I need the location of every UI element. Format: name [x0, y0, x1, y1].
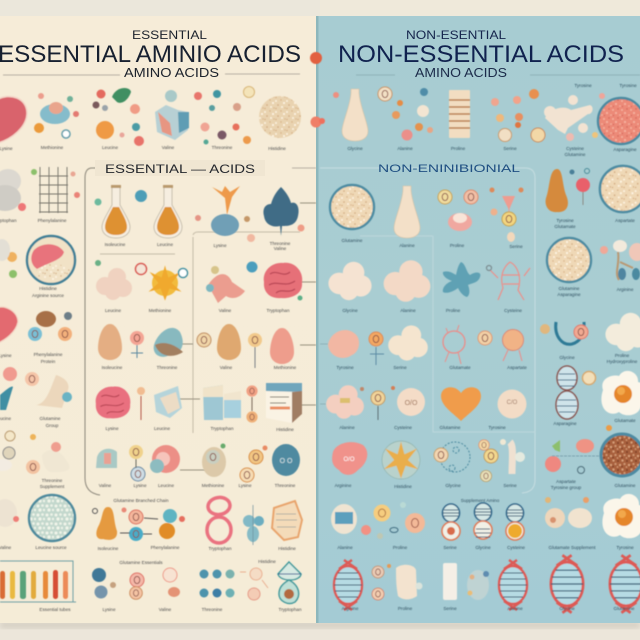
icon: pale blue cloth — [137, 386, 182, 431]
essential side illustrations — [0, 52, 322, 612]
icon: pink tree with medallions: Glutamate — [449, 365, 471, 370]
icon: orange flower and blue blob — [195, 186, 255, 248]
non-essential side illustrations — [319, 83, 640, 613]
icon: pastel organ — [34, 93, 79, 150]
connector rules and container outlines — [3, 74, 640, 495]
icon: pink pin and yellow medallions: Serine — [509, 244, 523, 249]
icon: red dna three: Glycine — [559, 606, 575, 611]
icon: blue leaf — [263, 187, 304, 251]
icon: white puff two — [384, 260, 430, 313]
icon: cream smile lump: Cysteine — [394, 425, 412, 430]
icon: pink lump: Tyrosine — [336, 365, 354, 370]
icon: left figure row five — [0, 367, 72, 428]
icon: scattered salmon molecules — [491, 89, 545, 151]
icon: left bowl with pink: Arginine source — [32, 293, 64, 298]
icon: pink figure eight: Tryptophan — [208, 546, 232, 551]
icon: right cream blob: Hydroxyproline — [607, 359, 638, 364]
icon: left pair row six — [0, 431, 69, 489]
panel: essential amino acids background — [0, 16, 317, 623]
icon: orange heart — [440, 387, 481, 430]
subtitle: amino acids left: AMINO ACIDS — [124, 66, 219, 80]
icon: fried egg one — [601, 371, 640, 423]
icon: blue ball: Threonine — [275, 483, 296, 488]
icon: red meat — [0, 96, 27, 151]
icon: cream round: C/O — [507, 400, 518, 406]
icon: pale blue cloth: Leucine — [154, 426, 170, 431]
icon: orange flask two: Leucine — [157, 242, 173, 247]
icon: left bowl with pink: Histidine — [39, 286, 57, 291]
icon: white puff one: Glycine — [342, 308, 358, 313]
icon: red dna one — [334, 560, 362, 611]
icon: blue leaf: Threonine — [270, 241, 291, 246]
icon: pale peach figure — [240, 559, 276, 600]
icon: left mint bowl: Leucine source — [35, 545, 67, 550]
icon: grey figure and circles — [96, 445, 147, 488]
icon: left mint bowl — [0, 495, 75, 550]
icon: scattered molecules: Threonine — [212, 145, 233, 150]
icon: cream capsule: Proline — [398, 606, 413, 611]
chart: test tubes: Essential tubes — [39, 607, 71, 612]
icon: fried egg two: Tyrosine — [616, 545, 634, 550]
icon: cream lump: Serine — [393, 365, 407, 370]
icon: leaf and small molecules: Leucine — [102, 145, 118, 150]
chart: test tubes — [0, 561, 76, 612]
icon: peach medallion — [393, 513, 425, 550]
icon: left figure row five: Group — [46, 423, 59, 428]
icon: scattered salmon molecules: Serine — [503, 146, 517, 151]
icon: brown ellipse and circles: Phenylalanine — [34, 352, 63, 357]
icon: blue dot grid — [200, 570, 234, 612]
icon: right figure row three: Arginine — [617, 287, 634, 292]
icon: pink egg: Methionine — [274, 365, 297, 370]
icon: left bowl with pink — [0, 236, 75, 298]
icon: blue star — [443, 262, 480, 313]
icon: pink tree: Cysteine — [504, 308, 522, 313]
icon: pink linked circles: Valine — [159, 607, 172, 612]
icon: cream flask — [319, 89, 368, 151]
icon: pale capsule — [331, 504, 371, 550]
icon: pink egg — [270, 328, 297, 370]
icon: brown ellipse and circles: Protein — [41, 359, 56, 364]
icon: pale lump row five: Alanine — [339, 425, 355, 430]
icon: pink lump row six: O/O — [343, 457, 355, 463]
icon: blue molecules — [92, 568, 116, 612]
icon: red dna three — [551, 555, 583, 613]
icon: red dna four — [610, 555, 640, 613]
icon: egg with circles: Valine — [220, 365, 233, 370]
icon: cream smile lump — [394, 388, 425, 430]
icon: small dna three: Cysteine — [507, 545, 525, 550]
icon: dna helix right: Asparagine — [553, 421, 577, 426]
icon: left figure row five: Glutamine — [40, 416, 61, 421]
icon: egg brown: Isoleucine — [102, 365, 123, 370]
icon: egg with circles — [197, 324, 262, 370]
icon: orange pear right — [546, 169, 576, 229]
icon: teal and orange cluster — [151, 509, 185, 550]
icon: blue molecules: Lysine — [102, 607, 116, 612]
icon: white tube: Serine — [443, 606, 457, 611]
icon: orange heart: Glutamine — [440, 425, 461, 430]
icon: blue swirl network: Glycine — [445, 483, 461, 488]
icon: orange flask two — [94, 185, 182, 247]
icon: beige bowl middle: Asparagine — [557, 292, 581, 297]
icon: supplement boxes — [203, 385, 258, 431]
icon: teal dna bulb: Tryptophan — [278, 607, 302, 612]
icon: grey cloud — [0, 169, 26, 223]
icon: blue ball — [272, 444, 300, 488]
icon: large box — [266, 383, 302, 432]
icon: cream lump — [388, 325, 428, 370]
icon: small dna two: Glycine — [475, 545, 491, 550]
icon: circle and blue-brown blob: Threonine — [157, 365, 178, 370]
subtitle: amino acids right: AMINO ACIDS — [415, 66, 507, 80]
icon: pink pin and yellow medallions — [490, 188, 524, 249]
icon: small dna one — [442, 504, 460, 550]
icon: salmon bowl: Tyrosine — [619, 83, 637, 88]
icon: pale vial dots — [467, 570, 489, 600]
icon: red dna one: Arginine — [342, 606, 359, 611]
icon: red brain — [264, 263, 302, 313]
icon: circle and blue-brown blob — [130, 328, 183, 370]
icon: orange pear right: Glutamate — [554, 224, 576, 229]
icon: right blue ring: Glycine — [559, 355, 575, 360]
icon: medallions pair — [238, 446, 268, 488]
title: essential small heading: ESSENTIAL — [132, 28, 207, 42]
icon: medallion cluster: Alanine — [397, 146, 413, 151]
icon: pink figure eight — [207, 496, 232, 551]
icon: egg brown — [98, 324, 123, 370]
icon: yellow medallion — [374, 502, 406, 539]
icon: pale pink blob: Leucine — [105, 308, 121, 313]
icon: pink blob and medallions: Proline — [450, 243, 465, 248]
icon: blue figure — [243, 505, 264, 545]
icon: white bones: Glutamine — [565, 152, 586, 157]
icon: salmon bowl: Asparagine — [613, 147, 637, 152]
icon: cream smile lump: O/O — [405, 400, 418, 407]
icon: brown seed bowl — [601, 425, 640, 488]
icon: stacked tablets: Proline — [451, 146, 466, 151]
icon: fried egg one: Glutamate — [614, 418, 636, 423]
icon: blue and salmon cloth: Valine — [162, 145, 175, 150]
icon: cream round: Tyrosine — [488, 425, 506, 430]
panel: non-essential amino acids background — [317, 16, 640, 623]
icon: orange flask: Isoleucine — [105, 242, 126, 247]
panel divider — [316, 16, 318, 623]
icon: stacked tablets — [449, 90, 470, 151]
icon: supplement boxes: Tryptophan — [210, 426, 234, 431]
icon: pastel organ: Methionine — [41, 145, 64, 150]
icon: pale pink blob — [95, 260, 132, 313]
icon: grey figure and circles: Valine — [99, 483, 112, 488]
icon: yellow star compass: Histidine — [394, 484, 412, 489]
icon: brown ellipse and circles — [28, 311, 72, 364]
icon: orange pear: Isoleucine — [98, 546, 119, 551]
icon: yellow medallions and figure — [479, 439, 525, 488]
icon: white tube — [443, 563, 457, 611]
icon: right cream blob — [605, 313, 640, 364]
icon: small dna one: Serine — [443, 545, 457, 550]
icon: right figure row three — [600, 240, 640, 292]
icon: white bones — [544, 83, 598, 157]
icon: right green and pink cluster: Aspartate — [556, 479, 576, 484]
icon: red dna two: Alanine — [507, 606, 523, 611]
icon: beige egg — [202, 444, 226, 488]
icon: orange medallion stem — [369, 332, 384, 365]
icon: beige ball — [259, 96, 301, 151]
icon: red dna four: Glutamine — [614, 606, 635, 611]
title: essential amino acids: ESSENTIAL AMINIO ACIDS — [0, 41, 301, 68]
icon: pink lump row six: Arginine — [335, 483, 352, 488]
icon: pink tree — [486, 262, 530, 313]
icon: white bones: Tyrosine — [574, 83, 592, 88]
icon: blue and salmon cloth — [155, 90, 189, 150]
icon: scattered molecules — [194, 86, 254, 150]
title: non-essential small heading: NON-ESENTIAL — [406, 28, 506, 42]
icon: pink tree with medallions: Aspartate — [507, 365, 527, 370]
icon: white puff one — [328, 262, 372, 313]
icon: blue swirl network — [434, 442, 470, 488]
chart: ladder — [31, 167, 80, 223]
icon: paired medallions — [372, 564, 391, 600]
icon: dna helix right — [553, 366, 596, 426]
icon: salmon bowl — [598, 83, 640, 152]
icon: orange pear right: Tyrosine — [556, 218, 574, 223]
icon: pink lump row six — [332, 442, 367, 488]
icon: yellow medallion stem — [360, 386, 395, 420]
icon: cream capsule — [396, 565, 422, 611]
icon: grey figure and circles: Lysine — [133, 483, 147, 488]
icon: right pair of lumps — [545, 497, 596, 550]
icon: orange flask — [102, 185, 130, 247]
icon: orange hexagon: Histidine — [278, 546, 296, 551]
icon: red medallion — [570, 168, 590, 205]
icon: right green and pink cluster — [545, 439, 600, 490]
icon: pale lump row five — [326, 385, 364, 430]
icon: right pair of lumps: Glutamate Supplement — [548, 545, 596, 550]
icon: blue star: Proline — [446, 308, 461, 313]
icon: yellow sunburst — [136, 264, 188, 313]
icon: peach medallion: Proline — [393, 545, 408, 550]
icon: left pair row six: Supplement — [40, 484, 65, 489]
icon: medallion cluster — [378, 87, 433, 151]
icon: teal and orange cluster: Phenylalanine — [151, 545, 180, 550]
icon: brown seed bowl: Glutamine — [615, 483, 636, 488]
icon: right green and pink cluster: Tyrosine group — [551, 485, 582, 490]
icon: molecule chain — [120, 508, 158, 541]
icon: cream flask: Glycine — [347, 146, 363, 151]
icon: pink blob and medallions — [438, 190, 478, 248]
icon: teal dna bulb — [278, 562, 302, 612]
icon: cream round — [488, 390, 526, 430]
section heading: essential acids — [95, 160, 265, 176]
heading: small group label right: Supplement Amino — [461, 498, 500, 503]
icon: blue leaf: Valine — [274, 246, 287, 251]
icon: beige bowl right top: Aspartate — [615, 218, 635, 223]
icon: pink lump — [328, 330, 359, 370]
icon: right blue ring — [540, 322, 588, 360]
icon: rose: Leucine — [158, 483, 174, 488]
icon: small dna three — [506, 504, 525, 550]
icon: left pair row six: Threonine — [42, 478, 63, 483]
icon: pink brain row five — [96, 386, 130, 431]
icon: yellow medallions and figure: Serine — [503, 483, 517, 488]
icon: orange hexagon — [272, 501, 302, 551]
icon: white bones: Cysteine — [566, 146, 584, 151]
icon: red connector dots — [310, 52, 322, 128]
icon: beige bowl left — [330, 185, 374, 243]
icon: cream flask large: Alanine — [399, 243, 415, 248]
icon: pale peach figure: Histidine — [258, 559, 276, 564]
icon: blue ball: O O — [280, 458, 293, 465]
icon: red heart left — [0, 307, 18, 358]
icon: beige ball: Histidine — [268, 146, 286, 151]
heading: small group label left: Glutamine Branched Chain — [113, 498, 169, 503]
icon: large box: Histidine — [276, 427, 294, 432]
icon: beige bowl left: Glutamine — [342, 238, 363, 243]
icon: orange flower and blue blob: Lysine — [213, 243, 227, 248]
icon: red dna two — [499, 560, 527, 611]
icon: blue dot grid: Threonine — [202, 607, 223, 612]
icon: pastel plant: Valine — [219, 308, 232, 313]
icon: pink brain row five: Lysine — [105, 426, 119, 431]
icon: white puff two: Alanine — [400, 308, 416, 313]
icon: yellow sunburst: Methionine — [149, 308, 172, 313]
icon: medallions pair: Lysine — [238, 483, 252, 488]
heading: small group label left lower: Glutamine Essentials — [119, 560, 163, 565]
icon: rose — [150, 445, 180, 488]
icon: pink linked circles — [130, 568, 180, 612]
icon: yellow star compass — [382, 441, 420, 489]
chart: ladder: Phenylalanine — [38, 218, 67, 223]
icon: pink tree with medallions — [443, 325, 527, 370]
icon: beige egg: Methionine — [202, 483, 225, 488]
icon: small dna two — [474, 503, 492, 550]
icon: beige bowl middle — [547, 238, 591, 297]
icon: beige bowl right top — [600, 166, 640, 223]
title: non-essential acids: NON-ESSENTIAL ACIDS — [338, 41, 624, 68]
icon: right cream blob: Proline — [615, 353, 630, 358]
icon: cream flask large — [394, 186, 420, 248]
section heading: essential acids: ESSENTIAL — ACIDS — [105, 164, 255, 176]
icon: beige bowl middle: Glutamine — [559, 286, 580, 291]
icon: pale capsule: Alanine — [337, 545, 353, 550]
icon: leaf and small molecules — [92, 88, 144, 150]
icon: red brain: Tryptophan — [266, 308, 290, 313]
panel shadow — [0, 622, 640, 628]
section heading: non-essential: NON-ENINIBIONIAL — [378, 163, 520, 175]
icon: fried egg two — [602, 494, 640, 550]
icon: pastel plant — [206, 262, 258, 313]
icon: orange pear — [92, 507, 119, 551]
